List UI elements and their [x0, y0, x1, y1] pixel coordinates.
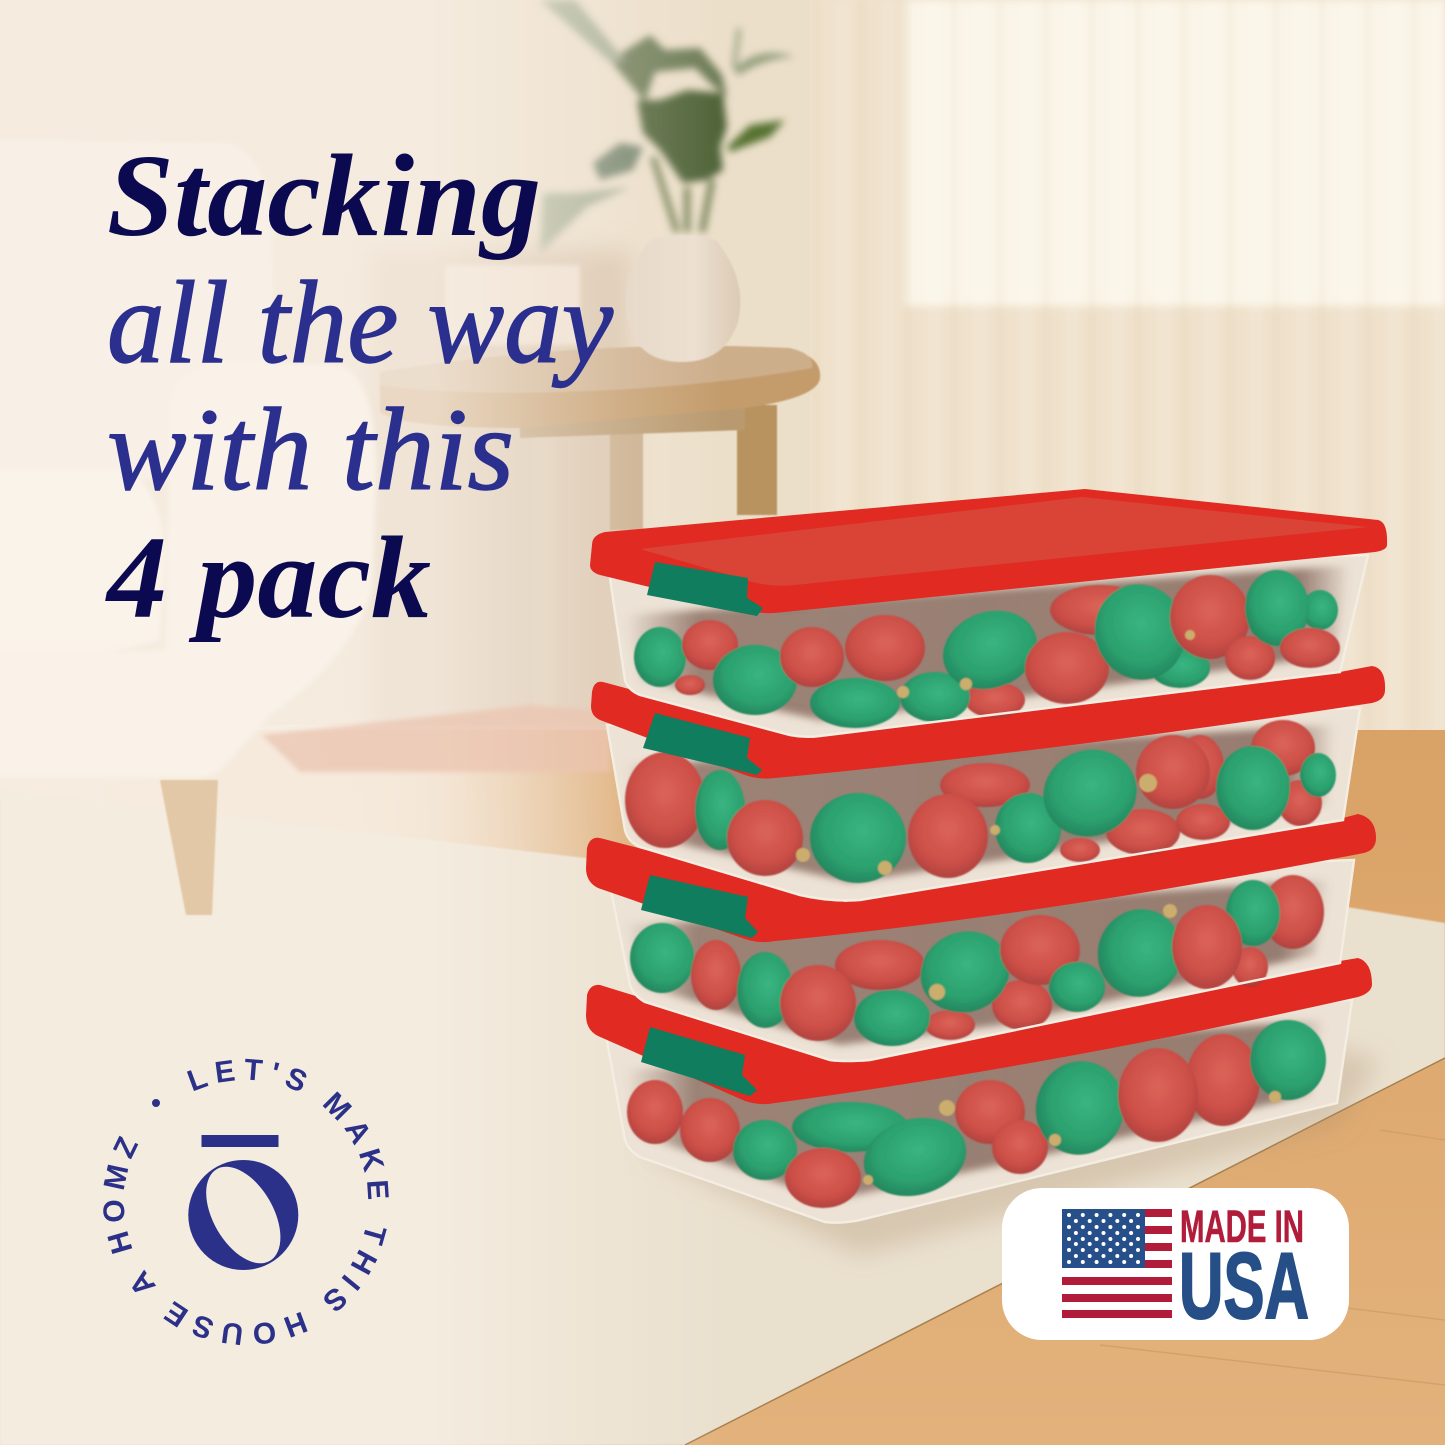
box 1 dark interior	[625, 565, 1350, 720]
title line: 4 pack: 4 pack	[105, 512, 431, 643]
made in text: MADE IN	[1180, 1201, 1304, 1252]
box 4 ornaments	[627, 1020, 1326, 1208]
side table	[380, 346, 820, 710]
box 2 green clasp	[643, 713, 762, 775]
american flag icon	[1062, 1209, 1172, 1318]
box 4 clear body front	[605, 1000, 1352, 1223]
box 2 dark interior	[625, 725, 1335, 882]
title	[105, 130, 614, 643]
pale box behind plant	[445, 265, 580, 345]
logo letter o	[188, 1154, 298, 1276]
stack shadow on rug	[640, 1040, 1380, 1255]
box 2 ornaments	[625, 720, 1336, 883]
box 1 clear body front	[610, 555, 1368, 737]
product: stack of four storage boxes	[586, 489, 1387, 1223]
box 4 lid	[586, 958, 1372, 1104]
box 4 dark interior	[625, 1020, 1325, 1200]
rug edge line	[685, 1058, 1445, 1445]
armchair	[0, 140, 376, 778]
vase	[626, 235, 740, 362]
box 1 lid	[590, 489, 1387, 613]
box 2 clear body back	[607, 708, 1360, 900]
box 1 lid top surface	[640, 497, 1368, 586]
box 3 dark interior	[625, 880, 1330, 1045]
box 2 clear body front	[607, 708, 1360, 900]
wall	[0, 0, 1445, 800]
logo macron bar	[202, 1135, 278, 1147]
USA text: USA	[1179, 1233, 1309, 1338]
curtain	[810, 0, 1445, 732]
box 2 lid	[591, 666, 1385, 779]
box 1 (top)	[590, 489, 1387, 737]
box 3 green clasp	[641, 875, 758, 938]
rug	[0, 790, 1445, 1445]
separator dot	[152, 1099, 160, 1107]
box 3 ornaments	[630, 875, 1324, 1046]
wood floor	[0, 730, 1445, 1445]
title line: Stacking: Stacking	[107, 130, 541, 261]
badge background	[1002, 1188, 1349, 1340]
box 3	[586, 814, 1376, 1061]
box 4 green clasp	[641, 1027, 757, 1096]
box 1 green clasp	[647, 562, 763, 616]
box 3 clear body back	[610, 860, 1354, 1061]
faded red lid on the floor	[262, 705, 610, 772]
potted plant	[540, 0, 795, 253]
title line: with this: with this	[107, 384, 514, 515]
circular slogan: LET'S MAKE THIS HOUSE A HOMZ	[103, 1058, 389, 1346]
left floor fade	[0, 725, 640, 870]
chair leg	[160, 780, 218, 915]
box 4 clear body back	[605, 1000, 1352, 1223]
shaded wall behind chair	[370, 250, 630, 730]
box 4 (bottom)	[586, 958, 1372, 1223]
box 1 clear body back	[610, 555, 1368, 737]
badge: made in USA	[1002, 1188, 1349, 1340]
brand logo seal	[103, 1058, 389, 1346]
box 3 lid	[586, 814, 1376, 942]
box 3 clear body front	[610, 860, 1354, 1061]
box 1 ornaments	[634, 570, 1340, 728]
title line: all the way: all the way	[107, 257, 614, 388]
box 2	[591, 666, 1385, 900]
